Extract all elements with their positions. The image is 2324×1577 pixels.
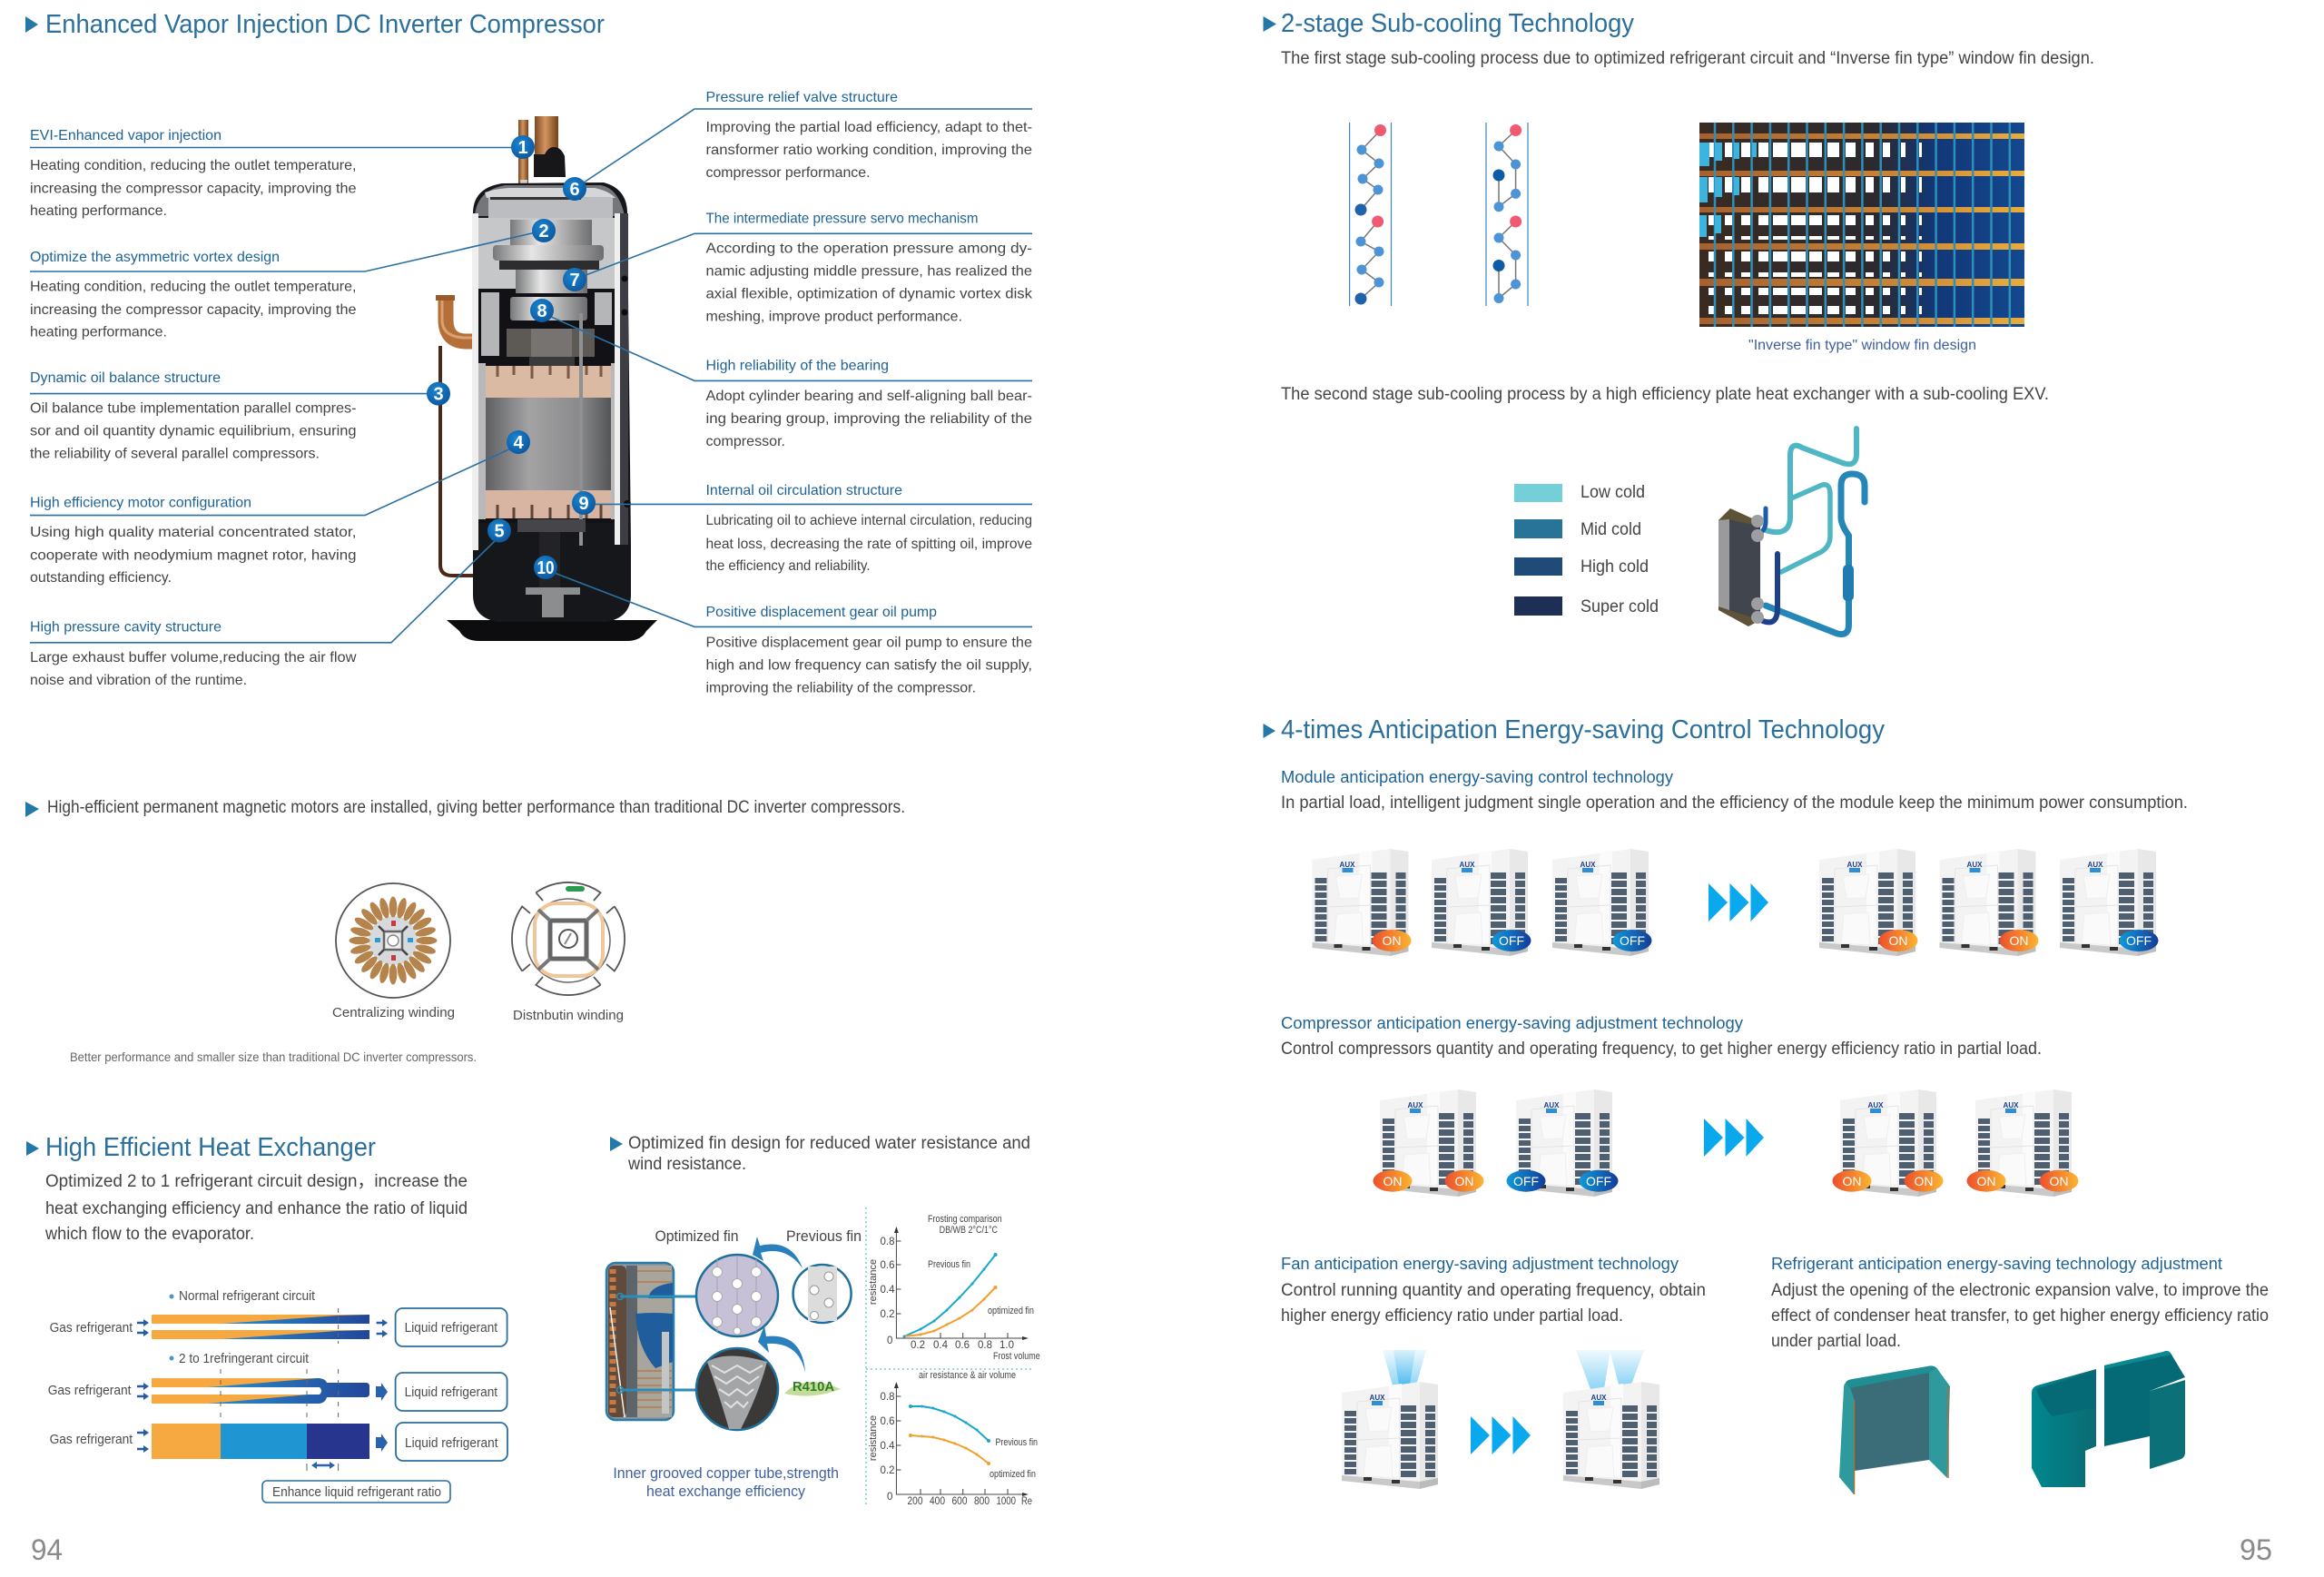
- callout: pressure relief valve: Pressure relief valve structure: [706, 90, 898, 105]
- callout: gear oil pump: improving the reliability of the compressor.: [706, 680, 976, 695]
- unit 8: OFF: [1586, 1174, 1611, 1188]
- units row 1 before: [1313, 849, 1652, 956]
- unit 3: AUX: [1581, 861, 1596, 869]
- photo: heat exchanger coil: [606, 1263, 674, 1420]
- unit 5: AUX: [1967, 861, 1983, 869]
- callout: asymmetric vortex: Optimize the asymmetric vortex design: [30, 250, 280, 265]
- callout: gear oil pump: Positive displacement gear oil pump: [706, 605, 937, 620]
- label: optimized fin: Optimized fin: [655, 1228, 739, 1245]
- fan anticipation text: higher energy efficiency ratio under partial load.: [1281, 1306, 1623, 1326]
- module anticipation text: [1281, 768, 2188, 813]
- chart: frosting comparison: 0.2: [911, 1340, 925, 1351]
- unit 9: ON: [1843, 1174, 1861, 1188]
- page number 95: 95: [2240, 1533, 2272, 1566]
- unit 9: ON: [1914, 1174, 1934, 1188]
- callout: asymmetric vortex: [30, 250, 357, 340]
- unit 7: ON: [1454, 1174, 1474, 1188]
- callout: EVI-enhanced vapor injection: increasing the compressor capacity, improving the: [30, 182, 357, 196]
- unit 6: OFF: [2126, 933, 2152, 948]
- unit 2: OFF: [1499, 933, 1524, 948]
- diagram: liquid ratio bar: Liquid refrigerant: [405, 1435, 498, 1451]
- chart: air resistance and air volume: resistance: [868, 1415, 879, 1461]
- marker 6: [563, 177, 586, 201]
- legend: Low cold: [1581, 483, 1645, 502]
- chart: frosting comparison: 0.8: [978, 1340, 992, 1351]
- unit 8: AUX: [1544, 1101, 1560, 1109]
- diagram: normal refrigerant circuit: [50, 1288, 507, 1346]
- diagram: normal refrigerant circuit: Gas refrigerant: [50, 1320, 133, 1336]
- unit 4: [1819, 849, 1917, 956]
- callout: intermediate pressure servo: The intermediate pressure servo mechanism: [706, 212, 979, 227]
- diagram: 2 to 1 circuit: [48, 1351, 507, 1419]
- chart: air resistance and air volume: air resistance & air volume: [919, 1370, 1016, 1381]
- unit 10: ON: [2050, 1174, 2068, 1188]
- callout: EVI-enhanced vapor injection: EVI-Enhanced vapor injection: [30, 128, 222, 143]
- panel: optimized fin design: [606, 1134, 1040, 1507]
- compressor anticipation text: [1281, 1014, 2042, 1059]
- callout: dynamic oil balance: sor and oil quantity dynamic equilibrium, ensuring: [30, 423, 356, 439]
- panel: high efficient heat exchanger: [26, 1133, 507, 1566]
- marker 1: 1: [517, 138, 528, 158]
- chart: air resistance and air volume: optimized fin: [990, 1469, 1036, 1480]
- callout: bearing reliability: [706, 359, 1032, 449]
- chart: air resistance and air volume: 400: [930, 1496, 945, 1507]
- callout: bearing reliability: High reliability of the bearing: [706, 359, 889, 374]
- callout: internal oil circulation: Internal oil circulation structure: [706, 483, 902, 498]
- units row 1 after: [1819, 849, 2159, 956]
- callout: intermediate pressure servo: [706, 212, 1033, 325]
- unit 7: ON: [1384, 1174, 1402, 1188]
- unit 3: OFF: [1620, 933, 1645, 948]
- chart: air resistance and air volume: 0.8: [881, 1392, 895, 1403]
- diagram: liquid ratio bar: [50, 1423, 507, 1503]
- unit 2: AUX: [1460, 861, 1475, 869]
- section arrow: [1264, 16, 1276, 32]
- fan unit single beam: AUX: [1370, 1394, 1385, 1402]
- callout: intermediate pressure servo: meshing, improve product performance.: [706, 310, 962, 325]
- callout: high pressure cavity: High pressure cavity structure: [30, 619, 222, 636]
- chart: air resistance and air volume: 600: [951, 1496, 968, 1507]
- refrigerant anticipation text: [1771, 1255, 2269, 1351]
- fin description: wind resistance.: [627, 1155, 746, 1174]
- description: which flow to the evaporator.: [44, 1225, 254, 1244]
- fin description: Optimized fin design for reduced water resistance and: [628, 1134, 1030, 1153]
- heading: compressor: Enhanced Vapor Injection DC Inverter Compressor: [45, 10, 605, 39]
- unit 1: [1313, 849, 1411, 956]
- footnote: Better performance and smaller size than traditional DC inverter compressors.: [70, 1050, 477, 1064]
- chart: frosting comparison: 0.6: [955, 1340, 970, 1351]
- legend: Super cold: [1581, 597, 1659, 616]
- callout: intermediate pressure servo: According to the operation pressure among dy-: [706, 241, 1032, 257]
- diagram: 2 to 1 circuit: Liquid refrigerant: [405, 1385, 498, 1400]
- unit 6: [2060, 849, 2159, 956]
- chart: frosting comparison: Previous fin: [928, 1259, 970, 1270]
- section arrow: [26, 1141, 39, 1156]
- fan unit double beam: AUX: [1591, 1394, 1607, 1402]
- callout: intermediate pressure servo: axial flexible, optimization of dynamic vortex disk: [706, 287, 1033, 302]
- chart: frosting comparison: optimized fin: [988, 1306, 1034, 1316]
- unit 1: ON: [1382, 933, 1402, 948]
- compressor anticipation text: Compressor anticipation energy-saving adjustment technology: [1281, 1014, 1743, 1032]
- chart: frosting comparison: 0.6: [881, 1260, 895, 1271]
- unit 10: [1966, 1089, 2079, 1197]
- connector lines: [617, 1293, 696, 1393]
- first stage text: The first stage sub-cooling process due to optimized refrigerant circuit and “Inverse fin type” window fin design.: [1281, 49, 2094, 68]
- fan unit double beam: [1563, 1350, 1659, 1489]
- chart: air resistance and air volume: 0.6: [881, 1416, 895, 1427]
- circuit diagram: inverse fin: [1486, 123, 1528, 306]
- chart: air resistance and air volume: 800: [974, 1496, 990, 1507]
- chart: air resistance and air volume: 0.4: [881, 1441, 895, 1452]
- unit 10: AUX: [2004, 1101, 2019, 1109]
- callout: gear oil pump: Positive displacement gear oil pump to ensure the: [706, 635, 1032, 650]
- callout: pressure relief valve: ransformer ratio working condition, improving the: [706, 143, 1032, 158]
- fin description: [627, 1134, 1030, 1174]
- callout: high pressure cavity: noise and vibration of the runtime.: [30, 673, 247, 688]
- panel: 2-stage sub-cooling: [1264, 9, 2094, 635]
- callout: dynamic oil balance: [30, 370, 357, 461]
- units row 2 before: [1373, 1089, 1618, 1197]
- circuit diagram: standard: [1350, 123, 1391, 306]
- fan unit single beam: [1342, 1350, 1438, 1489]
- callout: pressure relief valve: [706, 90, 1032, 181]
- callout: gear oil pump: high and low frequency can satisfy the oil supply,: [706, 657, 1032, 673]
- callout: EVI-enhanced vapor injection: heating performance.: [30, 203, 167, 219]
- curved arrows: [753, 1237, 805, 1373]
- marker 2: 2: [538, 222, 549, 241]
- condenser coil split section: [2032, 1351, 2185, 1487]
- marker 9: [572, 491, 596, 515]
- section arrow: [1264, 724, 1275, 738]
- marker 8: [530, 299, 554, 322]
- marker 3: 3: [433, 385, 444, 405]
- chart: frosting comparison: 0.8: [881, 1237, 895, 1247]
- description: Optimized 2 to 1 refrigerant circuit design，increase the: [45, 1172, 468, 1191]
- chart: air resistance and air volume: 0: [887, 1492, 892, 1503]
- marker 3: [427, 382, 450, 406]
- callout: internal oil circulation: [706, 483, 1032, 574]
- chart: frosting comparison: Frosting comparison: [928, 1214, 1002, 1225]
- module anticipation text: In partial load, intelligent judgment single operation and the efficiency of the module keep the minimum power consumption.: [1281, 793, 2188, 813]
- marker 5: 5: [494, 521, 505, 541]
- callout: bearing reliability: ing bearing group, improving the reliability of the: [706, 411, 1032, 427]
- chart: air resistance and air volume: Previous fin: [995, 1437, 1038, 1448]
- callout: pressure relief valve: compressor performance.: [706, 165, 870, 181]
- callout: motor configuration: cooperate with neodymium magnet rotor, having: [30, 548, 356, 563]
- numbered markers: [427, 135, 596, 579]
- chart: frosting comparison: resistance: [868, 1259, 879, 1305]
- fan anticipation text: Control running quantity and operating frequency, obtain: [1281, 1281, 1706, 1300]
- chart: frosting comparison: 0: [887, 1336, 892, 1346]
- refrigerant anticipation text: under partial load.: [1771, 1332, 1901, 1351]
- callout: motor configuration: Using high quality material concentrated stator,: [30, 525, 356, 540]
- arrow chevrons row 2: [1704, 1119, 1764, 1157]
- unit 2: [1432, 849, 1531, 956]
- condenser coil single section: [1839, 1365, 1950, 1494]
- marker 2: [532, 219, 556, 242]
- unit 4: AUX: [1847, 861, 1863, 869]
- caption: distribution winding: Distnbutin winding: [513, 1008, 624, 1023]
- arrow chevrons row 1: [1709, 883, 1768, 922]
- section arrow: [25, 16, 38, 33]
- marker 6: 6: [569, 180, 580, 200]
- marker 4: [507, 430, 530, 454]
- R410A tag: [784, 1379, 841, 1396]
- refrigerant anticipation text: effect of condenser heat transfer, to get higher energy efficiency ratio: [1771, 1306, 2269, 1326]
- unit 4: ON: [1888, 933, 1908, 948]
- chart: frosting comparison: Frost volume: [993, 1351, 1040, 1362]
- caption: inverse fin: "Inverse fin type" window fin design: [1748, 338, 1976, 353]
- second stage text: The second stage sub-cooling process by a high efficiency plate heat exchanger with a sub-cooling EXV.: [1281, 385, 2049, 404]
- chart: air resistance and air volume: 200: [908, 1496, 922, 1507]
- legend: Mid cold: [1581, 520, 1641, 539]
- caption: centralizing winding: Centralizing winding: [332, 1005, 455, 1020]
- plate heat exchanger illustration: [1718, 429, 1865, 635]
- callout: motor configuration: outstanding efficiency.: [30, 570, 172, 586]
- unit 8: OFF: [1513, 1174, 1539, 1188]
- callout: motor configuration: [30, 496, 356, 586]
- callout: asymmetric vortex: Heating condition, reducing the outlet temperature,: [30, 280, 357, 294]
- unit 8: [1507, 1089, 1618, 1197]
- marker 5: [487, 519, 511, 543]
- unit 7: AUX: [1408, 1101, 1423, 1109]
- diagram: liquid ratio bar: Gas refrigerant: [50, 1432, 133, 1447]
- caption: inner grooved copper tube: Inner grooved copper tube,strength: [613, 1465, 839, 1482]
- diagram: normal refrigerant circuit: Normal refrigerant circuit: [179, 1288, 316, 1304]
- fan anticipation text: [1281, 1255, 1706, 1326]
- description: heat exchanging efficiency and enhance the ratio of liquid: [45, 1199, 468, 1218]
- diagram: distribution winding: [512, 882, 625, 995]
- callout: EVI-enhanced vapor injection: Heating condition, reducing the outlet temperature,: [30, 158, 357, 173]
- page number 94: 94: [31, 1533, 63, 1566]
- fan anticipation text: Fan anticipation energy-saving adjustment technology: [1281, 1255, 1679, 1273]
- unit 5: ON: [2010, 933, 2028, 948]
- callout: internal oil circulation: Lubricating oil to achieve internal circulation, reducing: [706, 513, 1032, 528]
- unit 7: [1373, 1089, 1483, 1197]
- marker 8: 8: [537, 301, 547, 321]
- callout: bearing reliability: compressor.: [706, 434, 785, 449]
- chart: frosting comparison: DB/WB 2°C/1°C: [940, 1225, 998, 1236]
- label: previous fin: Previous fin: [786, 1228, 862, 1245]
- bullet arrow: [610, 1137, 623, 1151]
- detail: inner grooved tube circle: [696, 1348, 778, 1430]
- caption: inner grooved copper tube: heat exchange efficiency: [646, 1483, 806, 1500]
- marker 4: 4: [513, 433, 524, 453]
- chart: air resistance and air volume: 0.2: [881, 1465, 895, 1476]
- unit 6: AUX: [2088, 861, 2103, 869]
- marker 7: [563, 268, 586, 291]
- callout: intermediate pressure servo: namic adjusting middle pressure, has realized the: [706, 264, 1032, 280]
- description: [44, 1172, 468, 1244]
- unit 10: ON: [1977, 1174, 1995, 1188]
- chart: frosting comparison: 0.4: [881, 1285, 895, 1296]
- diagram: 2 to 1 circuit: Gas refrigerant: [48, 1383, 132, 1398]
- chart: air resistance and air volume: [868, 1370, 1038, 1507]
- chart: frosting comparison: 0.4: [933, 1340, 949, 1351]
- callout: internal oil circulation: the efficiency and reliability.: [706, 558, 870, 574]
- callout: high pressure cavity: [30, 619, 357, 688]
- compressor anticipation text: Control compressors quantity and operating frequency, to get higher energy efficiency ratio in partial load.: [1281, 1040, 2042, 1059]
- detail: optimized fin circle: [696, 1255, 778, 1336]
- chart: air resistance and air volume: 1000: [997, 1496, 1016, 1507]
- heading: anticipation control: 4-times Anticipation Energy-saving Control Technology: [1281, 715, 1885, 744]
- callout: internal oil circulation: heat loss, decreasing the rate of spitting oil, improve: [706, 537, 1032, 552]
- heading: sub-cooling: 2-stage Sub-cooling Technology: [1281, 9, 1634, 38]
- heading: heat exchanger: High Efficient Heat Exchanger: [45, 1133, 376, 1162]
- compressor cutaway illustration: [436, 116, 657, 641]
- diagram: normal refrigerant circuit: Liquid refrigerant: [405, 1320, 498, 1336]
- units row 2 after: [1832, 1089, 2079, 1197]
- unit 5: [1939, 849, 2039, 956]
- unit 9: AUX: [1868, 1101, 1884, 1109]
- panel: 4-times anticipation control: [1264, 715, 2272, 1566]
- marker 1: [511, 135, 535, 159]
- panel: EVI compressor page section: [25, 10, 1033, 695]
- leader lines: [30, 109, 1032, 643]
- panel: permanent magnet motors: [25, 798, 905, 1064]
- chart: air resistance and air volume: Re: [1021, 1496, 1032, 1507]
- detail: previous fin circle: [793, 1265, 852, 1323]
- callout: dynamic oil balance: Oil balance tube implementation parallel compres-: [30, 401, 357, 416]
- legend: High cold: [1581, 557, 1649, 577]
- module anticipation text: Module anticipation energy-saving control technology: [1281, 768, 1673, 786]
- unit 1: AUX: [1340, 861, 1355, 869]
- legend: [1514, 483, 1659, 616]
- callout: EVI-enhanced vapor injection: [30, 128, 357, 219]
- callout: dynamic oil balance: the reliability of several parallel compressors.: [30, 447, 320, 461]
- callout: bearing reliability: Adopt cylinder bearing and self-aligning ball bear-: [706, 389, 1032, 404]
- motor statement: High-efficient permanent magnetic motors are installed, giving better performance than traditional DC inverter compressors.: [47, 798, 905, 817]
- marker 10: 10: [537, 558, 554, 578]
- callout: asymmetric vortex: increasing the compressor capacity, improving the: [30, 302, 357, 318]
- refrigerant anticipation text: Adjust the opening of the electronic expansion valve, to improve the: [1771, 1281, 2269, 1300]
- callout: gear oil pump: [706, 605, 1032, 695]
- callout: high pressure cavity: Large exhaust buffer volume,reducing the air flow: [30, 650, 357, 665]
- unit 9: [1832, 1089, 1943, 1197]
- diagram: centralizing winding: [336, 883, 450, 998]
- chart: frosting comparison: 1.0: [1000, 1340, 1014, 1351]
- diagram: 2 to 1 circuit: 2 to 1refringerant circuit: [179, 1351, 310, 1366]
- callout: motor configuration: High efficiency motor configuration: [30, 496, 251, 510]
- caption: inner grooved copper tube: [613, 1465, 839, 1500]
- bullet arrow: [25, 802, 39, 817]
- chart: frosting comparison: 0.2: [881, 1309, 895, 1320]
- unit 3: [1552, 849, 1652, 956]
- callout: dynamic oil balance: Dynamic oil balance structure: [30, 370, 221, 386]
- marker 9: 9: [578, 494, 589, 514]
- marker 7: 7: [569, 271, 580, 291]
- photo: inverse fin window: [1699, 123, 2024, 327]
- refrigerant anticipation text: Refrigerant anticipation energy-saving technology adjustment: [1771, 1255, 2222, 1273]
- callout: pressure relief valve: Improving the partial load efficiency, adapt to thet-: [706, 120, 1032, 135]
- arrow chevrons fan: [1471, 1416, 1531, 1454]
- chart: frosting comparison: [868, 1214, 1040, 1362]
- R410A tag: R410A: [793, 1379, 834, 1395]
- diagram: liquid ratio bar: Enhance liquid refrigerant ratio: [272, 1484, 441, 1500]
- callout: asymmetric vortex: heating performance.: [30, 325, 167, 340]
